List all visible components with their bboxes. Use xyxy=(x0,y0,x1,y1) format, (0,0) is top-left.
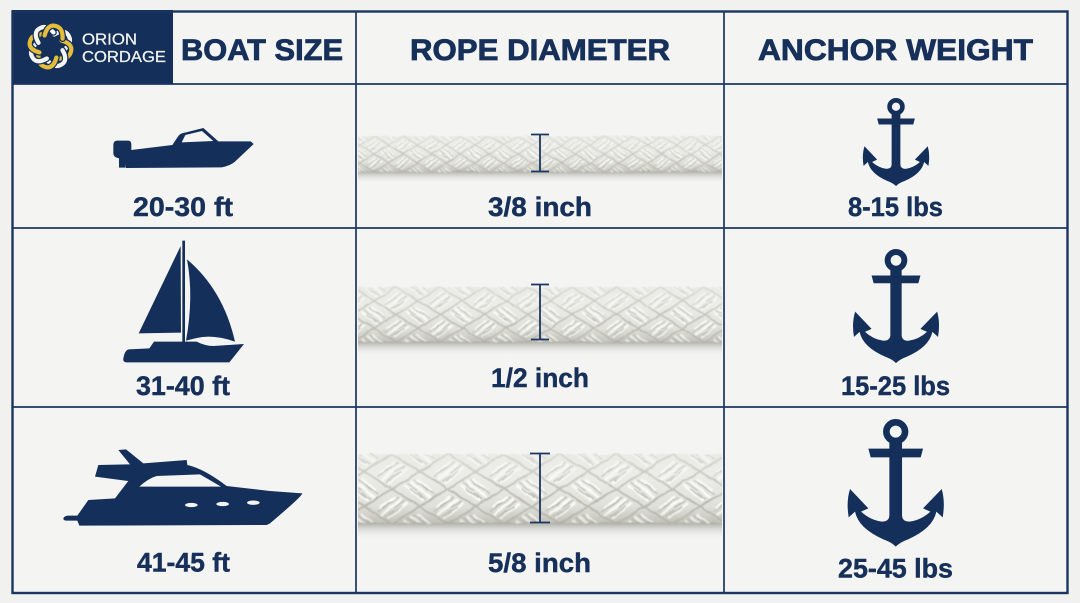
dimension marker: 5/8 inch xyxy=(530,454,550,522)
label: 41-45 ft: 41-45 ft xyxy=(137,548,230,578)
logo wordmark: CORDAGE xyxy=(82,49,166,66)
icon: motor yacht xyxy=(63,449,302,526)
label: 3/8 inch: 3/8 inch xyxy=(488,192,592,222)
rope body xyxy=(352,136,728,172)
icon: small anchor xyxy=(863,100,929,186)
label: 8-15 lbs: 8-15 lbs xyxy=(848,192,943,222)
heading: rope diameter: ROPE DIAMETER xyxy=(410,34,670,67)
dimension marker: 1/2 inch xyxy=(531,284,549,340)
rope shadow xyxy=(358,340,722,352)
label: 25-45 lbs: 25-45 lbs xyxy=(838,554,953,584)
label: 20-30 ft: 20-30 ft xyxy=(133,192,233,222)
rope body xyxy=(352,454,728,523)
label: 5/8 inch: 5/8 inch xyxy=(488,548,591,578)
label: 1/2 inch: 1/2 inch xyxy=(491,363,589,393)
panel: logo block xyxy=(12,10,173,84)
logo wordmark xyxy=(82,32,166,66)
icon: small motorboat xyxy=(113,128,254,168)
icon: sailboat xyxy=(123,241,244,362)
icon: large anchor xyxy=(848,422,944,547)
dimension marker: 3/8 inch xyxy=(531,134,549,172)
heading: boat size: BOAT SIZE xyxy=(181,34,343,67)
rope 1/2 inch xyxy=(352,287,728,356)
label: 31-40 ft: 31-40 ft xyxy=(136,371,230,401)
icon: braided ring logo xyxy=(24,20,77,73)
rope shadow xyxy=(358,522,722,534)
rope 5/8 inch xyxy=(352,454,728,539)
rope shadow xyxy=(358,170,722,180)
icon: medium anchor xyxy=(853,252,939,363)
rope 3/8 inch xyxy=(352,136,728,183)
heading: anchor weight: ANCHOR WEIGHT xyxy=(758,34,1033,67)
logo wordmark: ORION xyxy=(82,32,137,48)
rope body xyxy=(352,287,728,342)
label: 15-25 lbs: 15-25 lbs xyxy=(841,371,950,401)
